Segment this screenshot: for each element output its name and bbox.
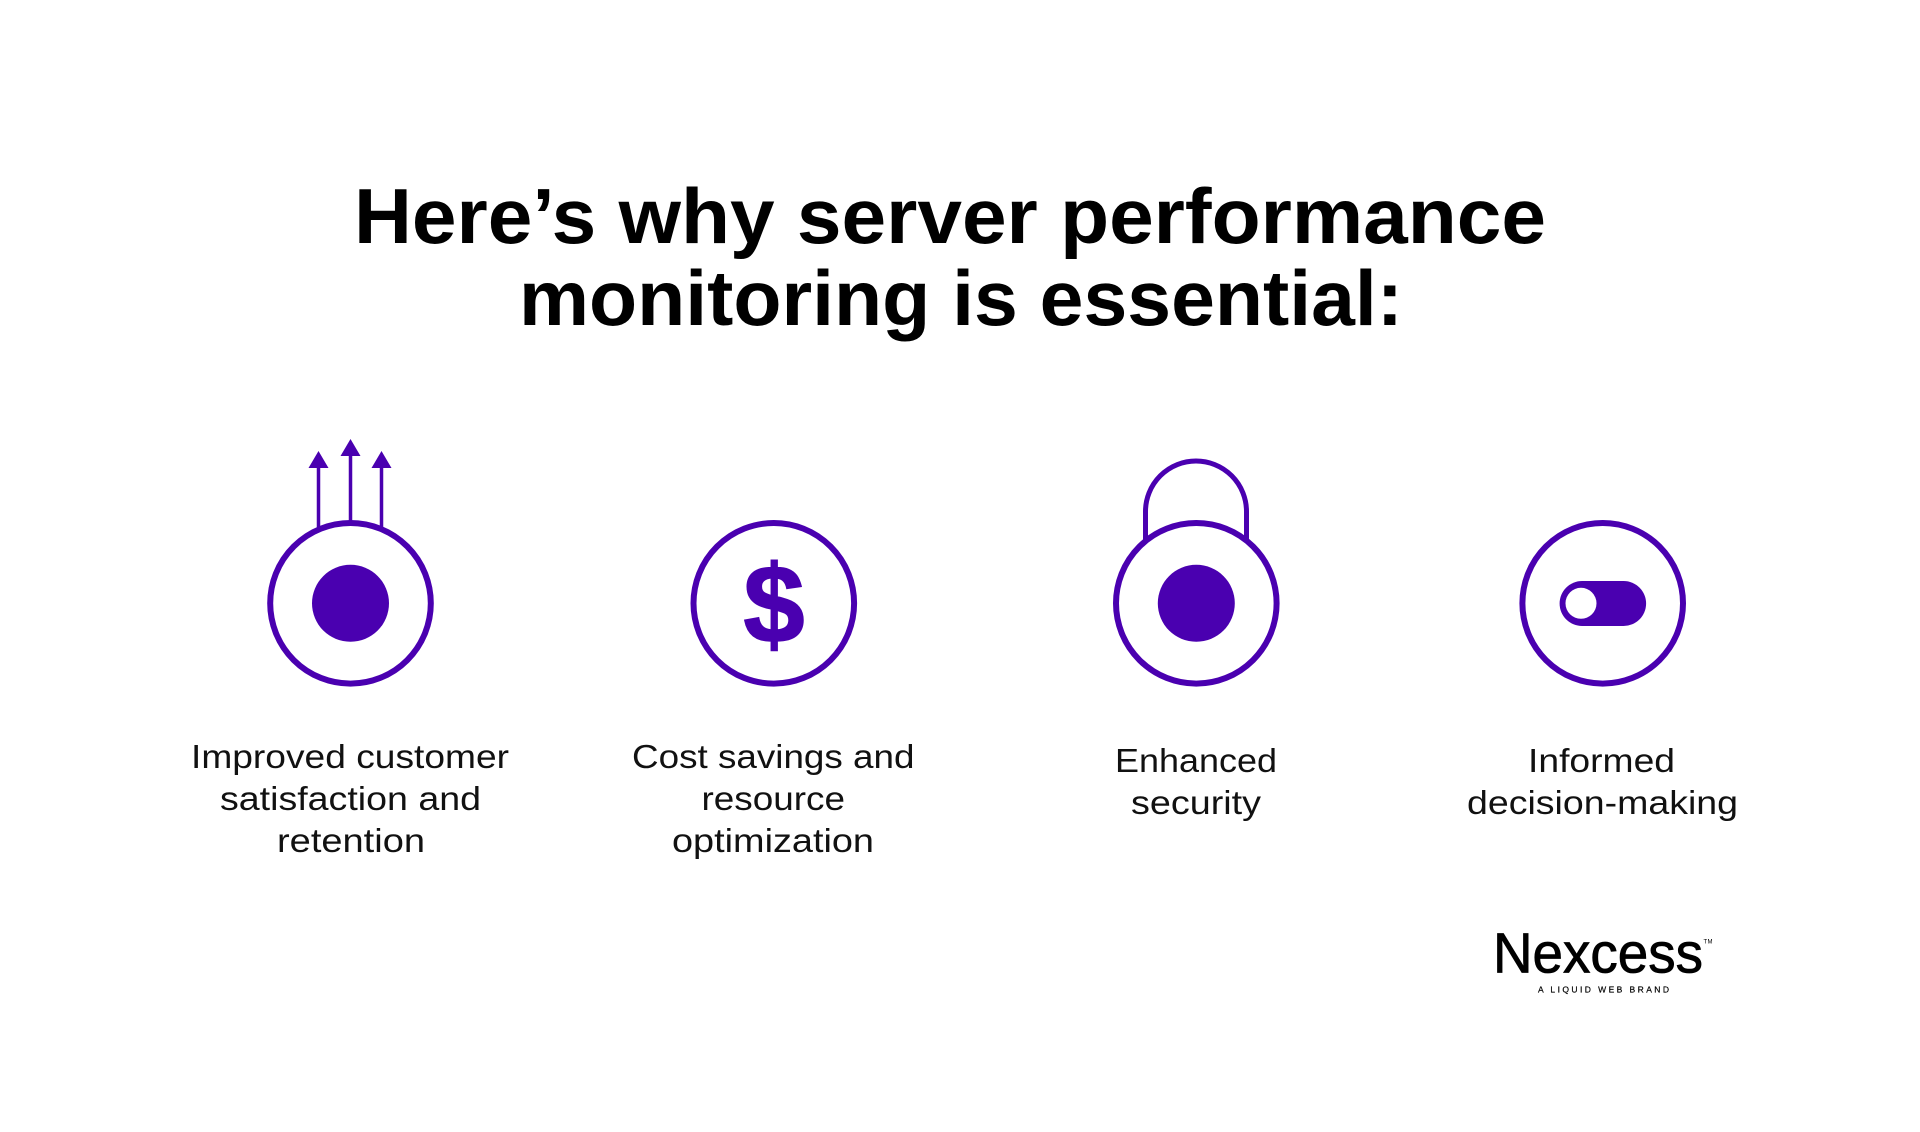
label: improved customer satisfaction and retention: satisfaction and [220, 781, 481, 818]
label: informed decision-making: Informed [1528, 743, 1675, 780]
label: enhanced security [1115, 743, 1277, 822]
icon: padlock [1116, 461, 1277, 684]
label: cost savings and resource optimization: resource [702, 781, 845, 818]
icon: toggle switch [1522, 523, 1683, 684]
logo: Nexcess: Nexcess [1493, 922, 1703, 986]
icon: dollar coin: $ [743, 544, 805, 666]
panel: cost savings [632, 523, 914, 860]
label: improved customer satisfaction and retention [191, 739, 509, 860]
title: Here’s why server performance [354, 172, 1546, 260]
label: cost savings and resource optimization: Cost savings and [632, 739, 914, 776]
label: improved customer satisfaction and retention: Improved customer [191, 739, 509, 776]
label: cost savings and resource optimization [632, 739, 914, 860]
panel: informed decision-making [1467, 523, 1738, 822]
label: cost savings and resource optimization: optimization [672, 823, 874, 860]
label: enhanced security: Enhanced [1115, 743, 1277, 780]
title: monitoring is essential: [519, 254, 1403, 342]
label: informed decision-making [1467, 743, 1738, 822]
title [354, 172, 1546, 342]
panel: enhanced security [1115, 461, 1277, 822]
icon: dollar coin [694, 523, 854, 684]
label: informed decision-making: decision-making [1467, 785, 1738, 822]
logo: Nexcess: TM [1704, 940, 1712, 946]
logo: Nexcess: A LIQUID WEB BRAND [1538, 984, 1669, 994]
icon: target with three up arrows [270, 439, 431, 684]
label: enhanced security: security [1131, 785, 1261, 822]
panel: improved customer satisfaction [191, 439, 509, 860]
label: improved customer satisfaction and retention: retention [277, 823, 425, 860]
